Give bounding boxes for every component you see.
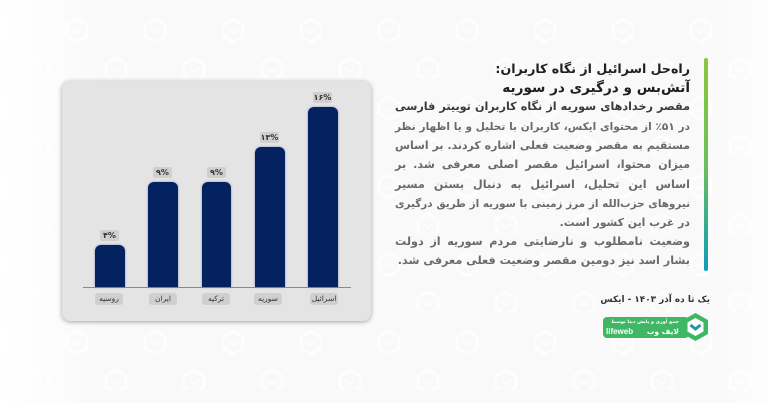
category label: Israel: [310, 293, 338, 305]
category label: Turkey: ترکیه: [208, 294, 224, 303]
axis line: [83, 287, 351, 288]
category label: Russia: روسیه: [99, 294, 119, 303]
value label: Turkey: [207, 167, 226, 178]
text block: main paragraph: مستقیم به مقصر وضعیت فعلی اشاره کردند. بر اساس: [395, 139, 690, 152]
category label: Russia: [95, 293, 123, 305]
icon: hexagon check: [687, 313, 708, 341]
text block: main paragraph: وضعیت نامطلوب و نارضایتی مردم سوریه از دولت: [395, 235, 690, 248]
value label: Syria: ۱۳%: [261, 133, 278, 142]
text block: main paragraph: در ۵۱٪ از محتوای ایکس، کاربران با تحلیل و یا اظهار نظر: [395, 121, 690, 133]
bar: Israel 16%: [308, 107, 338, 287]
text block: main paragraph: اساس این تحلیل، اسرائیل به دنبال بستن مسیر: [395, 178, 690, 191]
bar: Russia 4%: [95, 245, 124, 287]
bar: Syria 13%: [255, 147, 284, 287]
title: راه‌حل اسرائیل از نگاه کاربران:: [495, 61, 690, 76]
logo pill with text: لایف وب: [647, 327, 679, 336]
category label: Syria: [254, 293, 282, 305]
bar: Turkey 9%: [202, 182, 231, 287]
category label: Iran: ایران: [155, 294, 171, 303]
source and date: یک تا ده آذر ۱۴۰۳ - ایکس: [600, 295, 710, 305]
value label: Russia: ۴%: [103, 231, 116, 240]
category label: Iran: [149, 293, 177, 305]
text block: main paragraph: بشار اسد نیز دومین مقصر وضعیت فعلی معرفی شد.: [398, 254, 690, 267]
logo pill with text: جمع آوری و پایش دیتا توسط: [611, 320, 679, 325]
value label: Iran: ۹%: [156, 168, 169, 177]
text block: main paragraph: نیروهای حزب‌الله از مرز زمینی با سوریه از طریق درگیری: [395, 198, 690, 210]
value label: Russia: [100, 230, 119, 241]
category label: Israel: اسرائیل: [312, 294, 336, 303]
value label: Iran: [153, 167, 172, 178]
accent vertical bar: [704, 58, 708, 271]
text block: main paragraph: مقصر رخدادهای سوریه از نگاه کاربران توییتر فارسی: [395, 100, 690, 113]
title: [495, 61, 690, 96]
bar: Iran 9%: [148, 182, 178, 287]
logo pill with text: lifeweb: [606, 327, 633, 336]
panel: bar chart: [62, 81, 371, 321]
logo: lifeweb: [603, 313, 708, 341]
category label: Turkey: [202, 293, 230, 305]
text block: main paragraph: [394, 100, 690, 267]
value label: Turkey: ۹%: [210, 168, 223, 177]
value label: Israel: ۱۶%: [314, 93, 331, 102]
category label: Syria: سوریه: [258, 294, 278, 303]
title: آتش‌بس و درگیری در سوریه: [502, 80, 690, 96]
logo pill with text: [603, 317, 689, 338]
text block: main paragraph: در غرب این کشور است.: [560, 216, 690, 229]
text block: main paragraph: میزان محتوا، اسرائیل مقصر اصلی معرفی شد. بر: [395, 158, 690, 171]
